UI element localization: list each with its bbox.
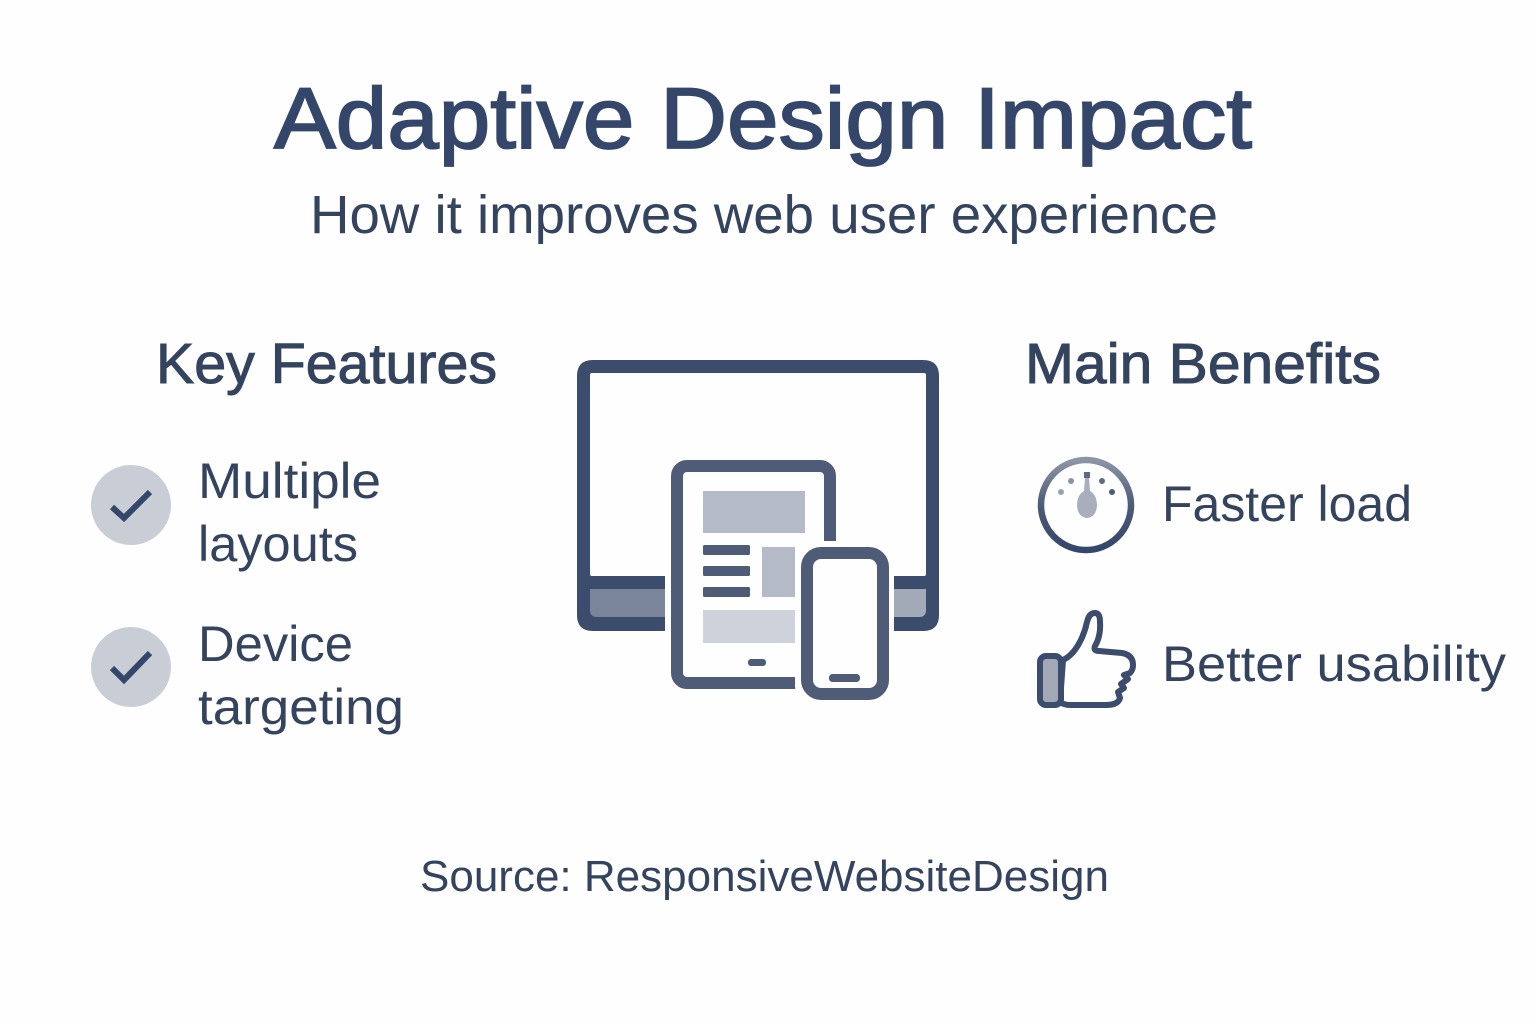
text: multiple layouts: Multiple <box>198 453 381 509</box>
icon: check badge <box>91 465 171 545</box>
text: multiple layouts <box>198 453 381 572</box>
text: device targeting: Device <box>198 616 353 672</box>
tablet content: text lines <box>703 545 750 597</box>
tablet content: side image block <box>762 547 795 597</box>
text: better usability: Better usability <box>1162 636 1506 692</box>
central illustration: devices <box>577 360 939 706</box>
text: device targeting: targeting <box>198 679 404 735</box>
icon: thumbs up <box>1040 613 1133 705</box>
tablet content: top image block <box>703 491 805 533</box>
text: multiple layouts: layouts <box>198 516 358 572</box>
feature item: multiple layouts <box>91 453 381 572</box>
heading: main benefits: Main Benefits <box>1025 332 1381 396</box>
phone home button <box>829 674 860 682</box>
benefit item: faster load <box>1041 460 1412 550</box>
icon: tablet <box>677 466 830 683</box>
feature item: device targeting <box>91 616 404 735</box>
subtitle: How it improves web user experience <box>310 185 1218 245</box>
text: device targeting <box>198 616 404 735</box>
icon: speedometer gauge <box>1041 460 1131 550</box>
icon: phone <box>795 541 894 706</box>
title: Adaptive Design Impact <box>274 71 1252 167</box>
tablet home button <box>748 659 766 666</box>
icon: desktop monitor <box>577 360 939 631</box>
white halo behind tablet and phone <box>665 560 894 705</box>
benefit item: better usability <box>1040 613 1506 705</box>
source note: Source: ResponsiveWebsiteDesign <box>420 852 1109 901</box>
panel: key features <box>91 332 497 735</box>
text: faster load: Faster load <box>1162 476 1412 532</box>
panel: main benefits <box>1025 332 1506 705</box>
tablet content: bottom block <box>703 610 795 643</box>
heading: key features: Key Features <box>156 332 497 396</box>
icon: check badge <box>91 627 171 707</box>
